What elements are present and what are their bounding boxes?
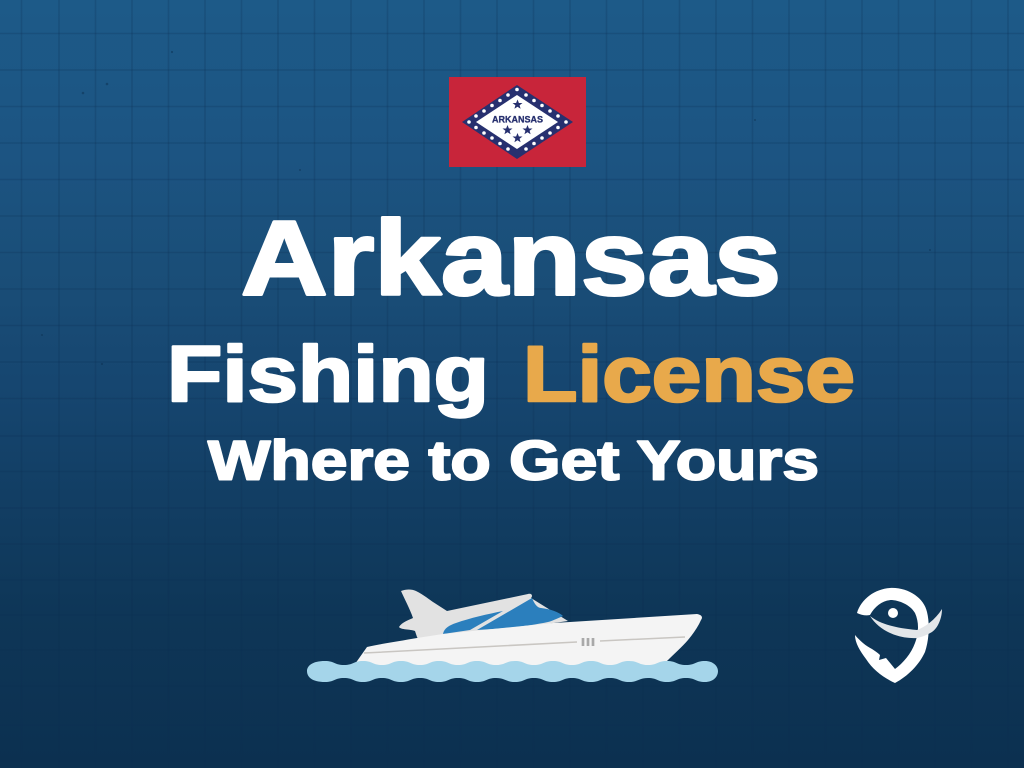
heading: Fishing License: Fishing bbox=[167, 329, 489, 418]
hull stripe and vents bbox=[364, 637, 685, 653]
icon: Arkansas state flag: ARKANSAS bbox=[492, 114, 543, 124]
water waves bbox=[307, 661, 718, 682]
title: Arkansas: Arkansas bbox=[241, 200, 781, 318]
heading: Fishing License: License bbox=[523, 329, 855, 418]
subtitle: Where to Get Yours: Where to Get Yours bbox=[208, 428, 819, 492]
fish tail band bbox=[870, 609, 942, 638]
hull bbox=[355, 614, 702, 670]
icon: white yacht on water bbox=[307, 590, 718, 682]
heading: Fishing License bbox=[167, 329, 855, 418]
fish eye bbox=[888, 608, 898, 618]
boat fin and cabin bbox=[399, 590, 568, 642]
fish body hook bbox=[855, 588, 929, 683]
icon: Arkansas state flag bbox=[449, 77, 586, 167]
cabin windows bbox=[443, 598, 563, 634]
icon: fish hook logo bbox=[855, 588, 942, 683]
